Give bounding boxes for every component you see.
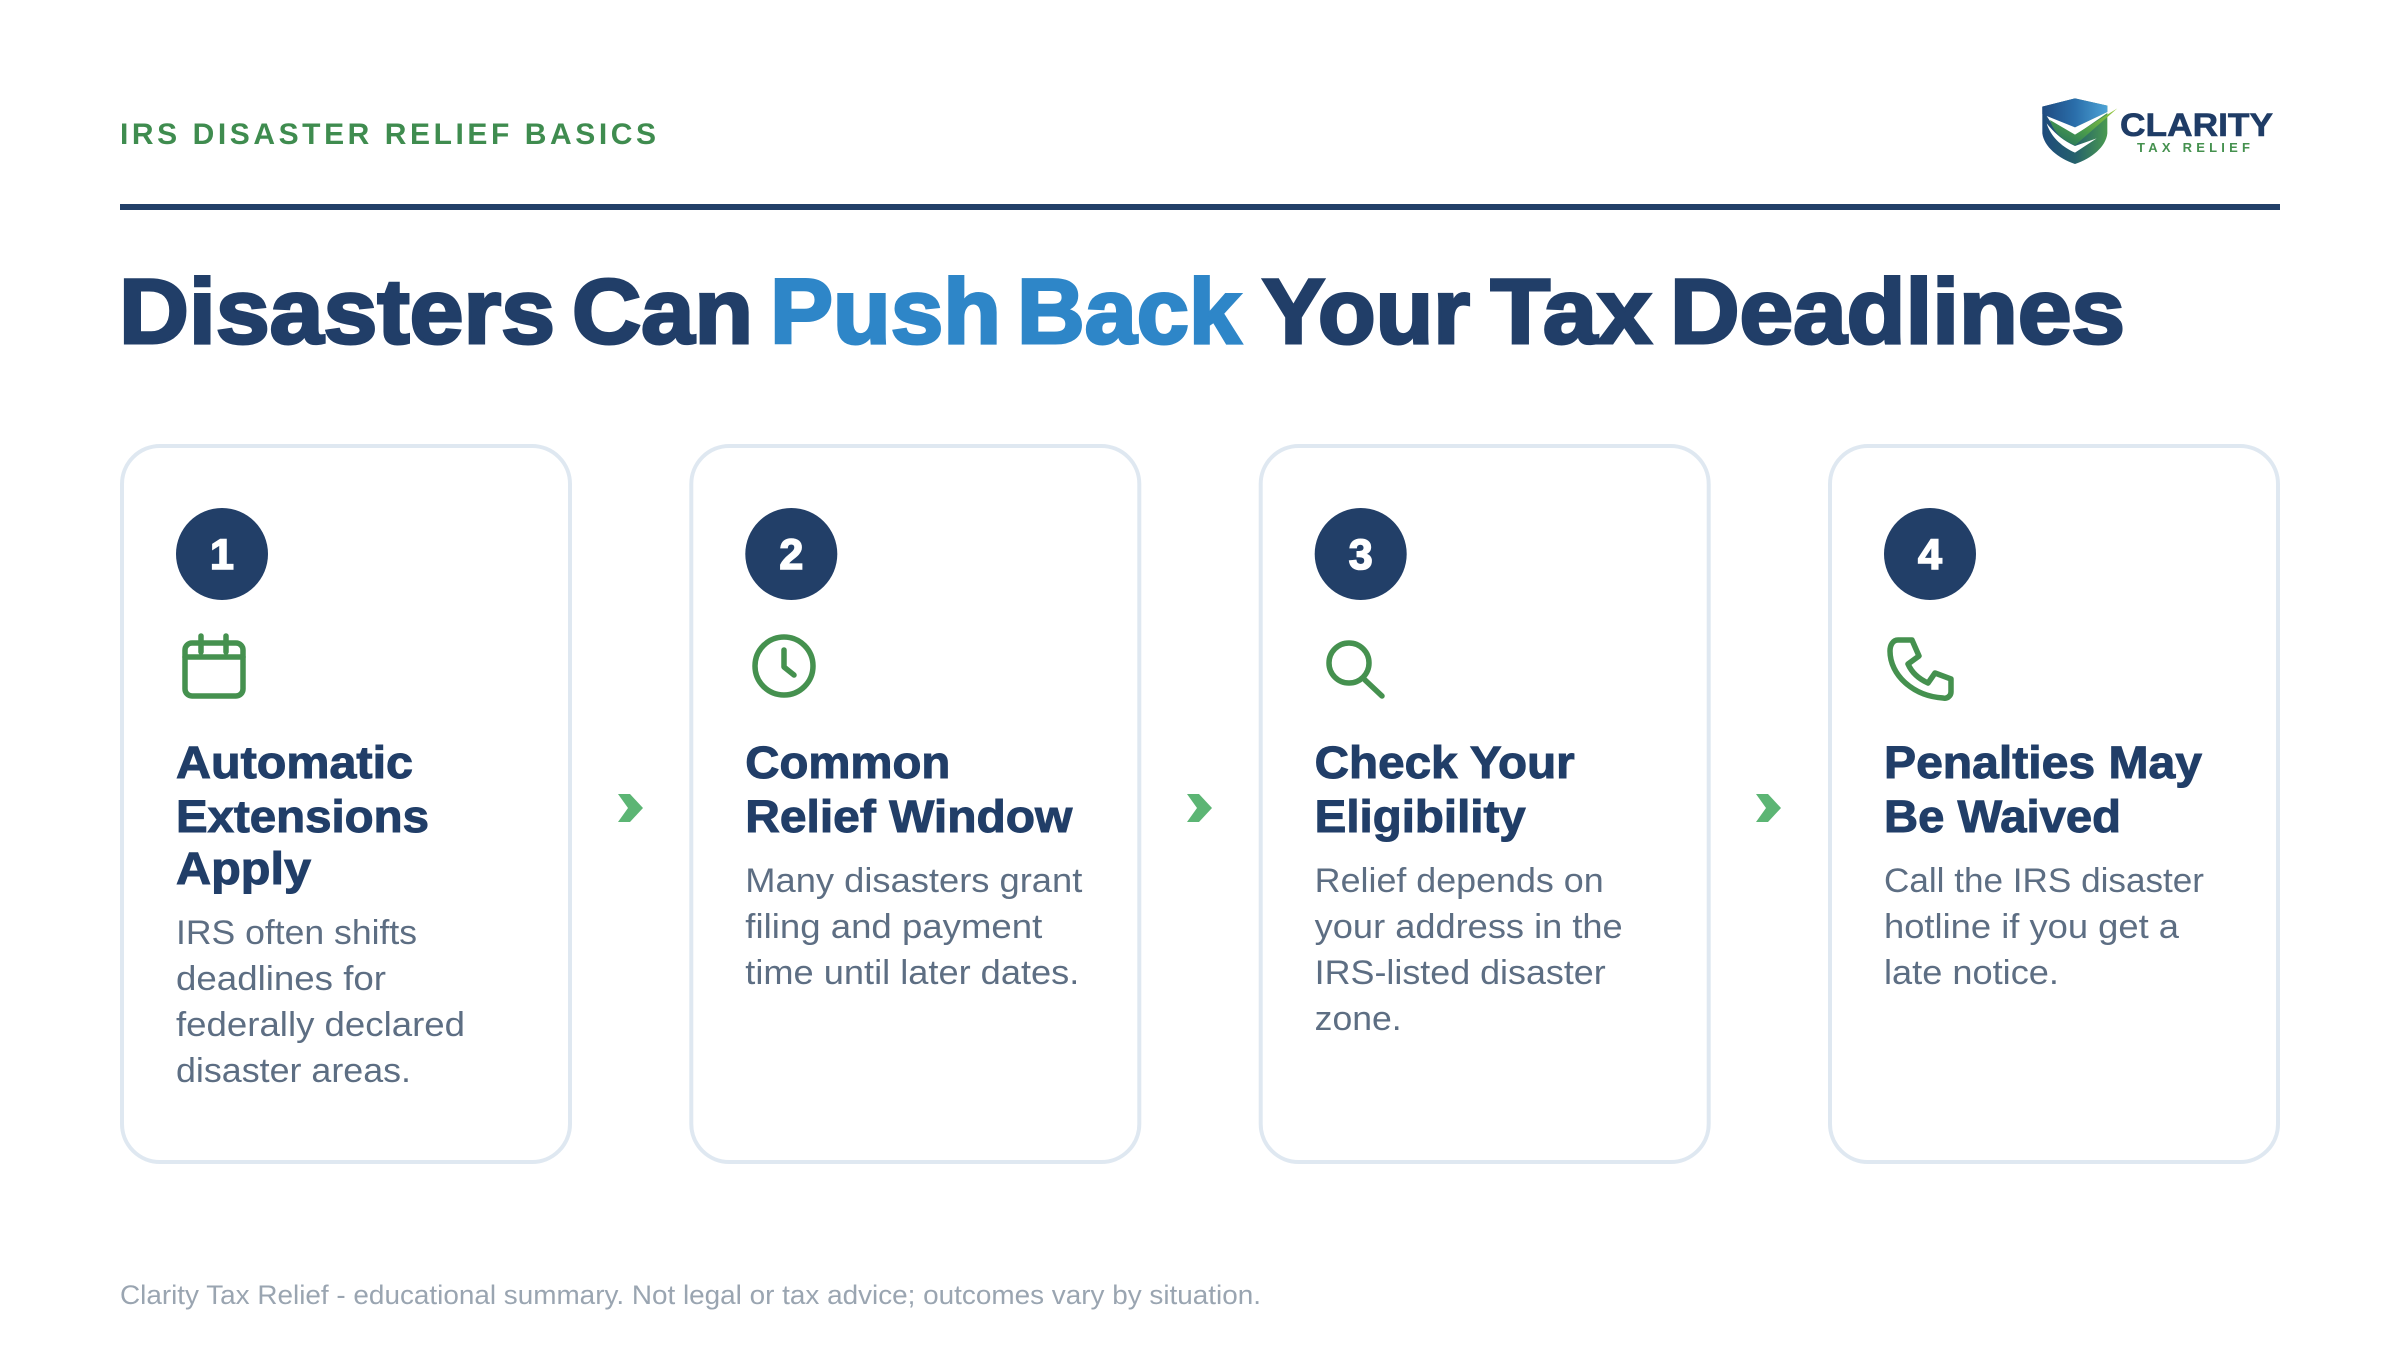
panel: step 4 penalties may be waived: [1830, 446, 2278, 1162]
icon: clock: [755, 637, 813, 695]
step number 3: 3: [1349, 531, 1373, 579]
body text: [1315, 862, 1623, 1038]
body text: Many disasters grant: [745, 862, 1083, 900]
arrow 2: [1187, 794, 1212, 822]
heading: automatic extensions apply: Extensions: [176, 791, 429, 842]
body text: Call the IRS disaster: [1884, 862, 2204, 900]
heading: check your eligibility: Eligibility: [1315, 791, 1526, 842]
step number 4: 4: [1918, 531, 1942, 579]
heading: penalties may be waived: Penalties May: [1884, 737, 2202, 788]
heading: common relief window: Relief Window: [745, 791, 1073, 842]
body text: IRS-listed disaster: [1315, 954, 1606, 992]
heading: common relief window: [745, 737, 1073, 842]
logo: Clarity Tax Relief: [2042, 98, 2273, 164]
title: Your: [1262, 261, 1470, 363]
panel: step 2 common relief window: [691, 446, 1139, 1162]
icon: shield with check: [2042, 98, 2117, 164]
body text: late notice.: [1884, 954, 2059, 992]
body text: [1884, 862, 2204, 992]
eyebrow heading: IRS DISASTER RELIEF BASICS: [120, 118, 656, 151]
title: Can: [572, 261, 753, 363]
title: Disasters: [119, 261, 555, 363]
body text: IRS often shifts: [176, 914, 417, 952]
heading: automatic extensions apply: Automatic: [176, 737, 413, 788]
icon: magnifying glass: [1329, 643, 1382, 696]
panel: step 1 automatic extensions: [122, 446, 570, 1162]
heading: common relief window: Common: [745, 737, 950, 788]
step number 4: [1884, 508, 1976, 600]
body text: deadlines for: [176, 960, 386, 998]
heading: check your eligibility: Check Your: [1315, 737, 1575, 788]
body text: Relief depends on: [1315, 862, 1604, 900]
arrow 3: [1756, 794, 1781, 822]
title: Push: [770, 261, 1001, 363]
arrow 1: [618, 794, 643, 822]
heading: automatic extensions apply: Apply: [176, 843, 311, 894]
title: Deadlines: [1670, 261, 2125, 363]
body text: [745, 862, 1083, 992]
step number 1: 1: [210, 531, 234, 579]
heading: penalties may be waived: Be Waived: [1884, 791, 2121, 842]
step number 3: [1315, 508, 1407, 600]
body text: federally declared: [176, 1006, 465, 1044]
title: [119, 261, 2125, 363]
body text: zone.: [1315, 1000, 1402, 1038]
heading: automatic extensions apply: [176, 737, 429, 894]
step number 1: [176, 508, 268, 600]
logo tagline: TAX RELIEF: [2137, 140, 2250, 155]
step number 2: [745, 508, 837, 600]
footer disclaimer: Clarity Tax Relief - educational summary. Not legal or tax advice; outcomes vary by situation.: [120, 1280, 1261, 1310]
heading: check your eligibility: [1315, 737, 1575, 842]
body text: disaster areas.: [176, 1052, 411, 1090]
title: Back: [1017, 261, 1242, 363]
body text: your address in the: [1315, 908, 1623, 946]
panel: step 3 check your eligibility: [1261, 446, 1709, 1162]
icon: calendar: [185, 636, 243, 696]
body text: hotline if you get a: [1884, 908, 2179, 946]
logo wordmark: CLARITY: [2120, 107, 2273, 143]
icon: phone: [1890, 640, 1951, 698]
body text: filing and payment: [745, 908, 1043, 946]
body text: [176, 914, 465, 1090]
step number 2: 2: [779, 531, 803, 579]
title: Tax: [1490, 261, 1652, 363]
body text: time until later dates.: [745, 954, 1079, 992]
heading: penalties may be waived: [1884, 737, 2202, 842]
